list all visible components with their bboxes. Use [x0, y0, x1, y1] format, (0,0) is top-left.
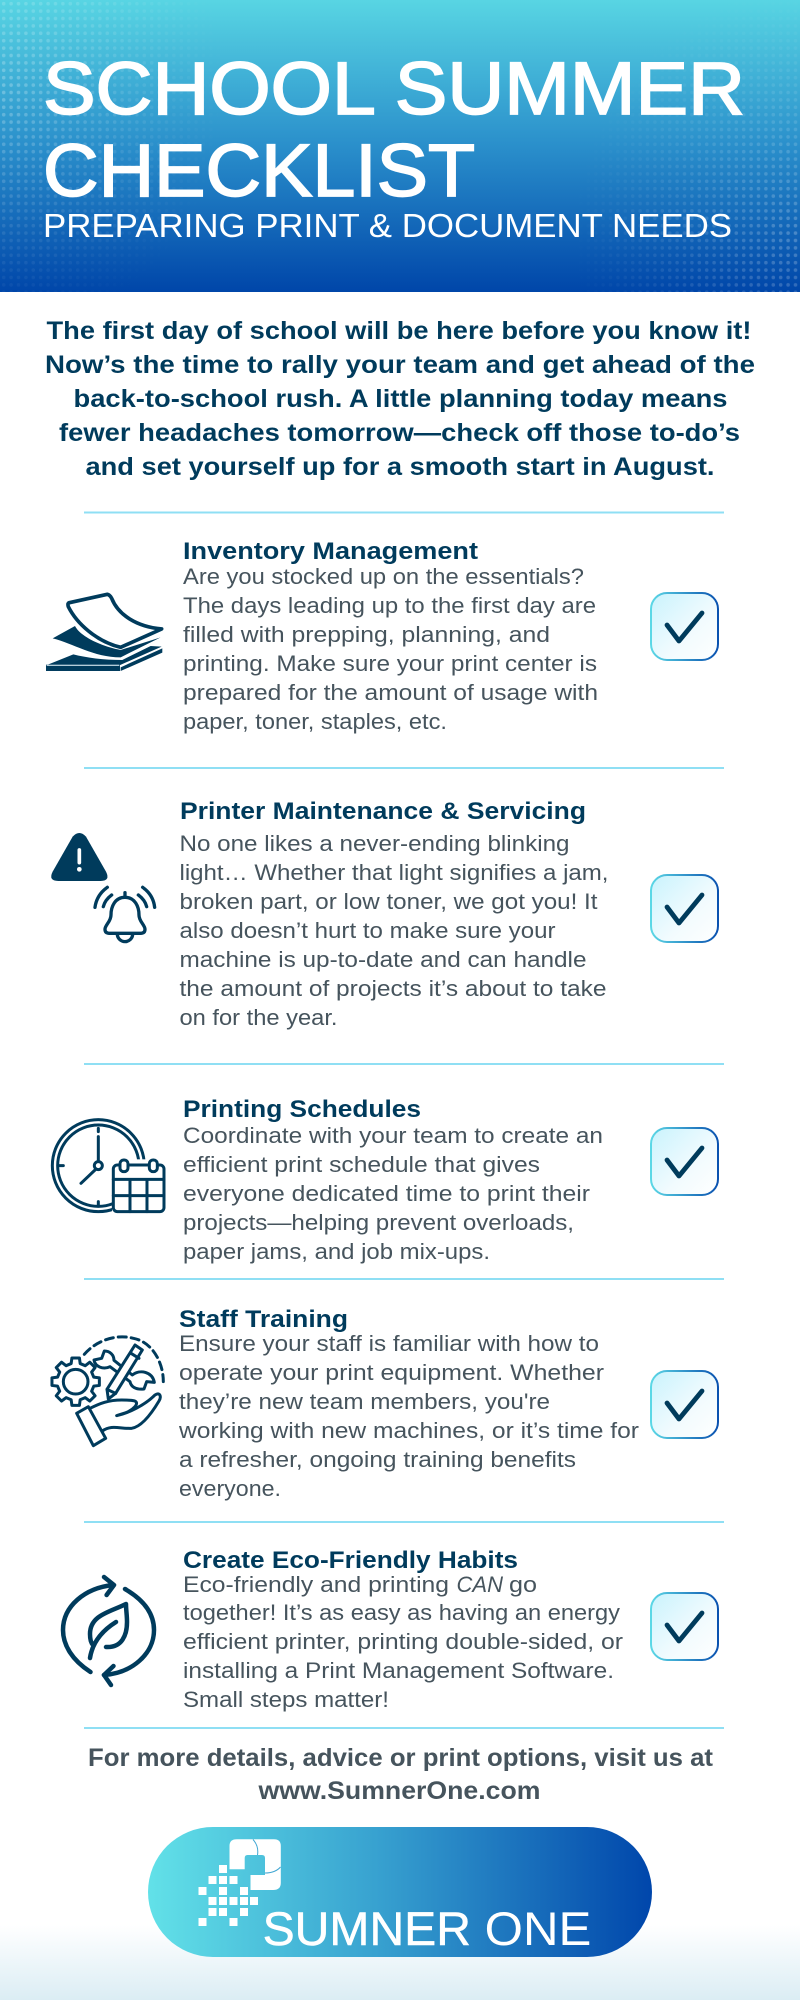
heading: Inventory Management: [183, 538, 478, 565]
body text: [183, 1123, 603, 1264]
body text: prepared for the amount of usage with: [183, 680, 598, 705]
panel: printing schedules: [52, 1096, 718, 1264]
body text: projects—helping prevent overloads,: [183, 1210, 574, 1235]
intro paragraph: back-to-school rush. A little planning today means: [74, 385, 728, 413]
body text: efficient print schedule that gives: [183, 1152, 540, 1177]
intro paragraph: The first day of school will be here before you know it!: [46, 317, 752, 345]
body text: printing. Make sure your print center is: [183, 651, 597, 676]
body text: CAN: [456, 1572, 504, 1597]
body text: operate your print equipment. Whether: [179, 1360, 605, 1385]
intro paragraph: and set yourself up for a smooth start in August.: [86, 453, 714, 481]
logo pill: [148, 1827, 652, 1957]
icon: checked box: [651, 1593, 718, 1660]
body text: [183, 1572, 624, 1712]
icon: checked box: [651, 1128, 718, 1195]
body text: everyone dedicated time to print their: [183, 1181, 591, 1206]
body text: installing a Print Management Software.: [183, 1658, 614, 1683]
body text: [180, 831, 608, 1030]
heading: Create Eco-Friendly Habits: [183, 1547, 518, 1574]
body text: a refresher, ongoing training benefits: [179, 1447, 576, 1472]
body text: also doesn’t hurt to make sure your: [180, 918, 556, 943]
body text: No one likes a never-ending blinking: [180, 831, 570, 856]
call to action text: For more details, advice or print options, visit us at: [88, 1744, 714, 1772]
body text: Eco-friendly and printing: [183, 1572, 449, 1597]
intro paragraph: Now’s the time to rally your team and get ahead of the: [45, 351, 755, 379]
icon: checked box: [651, 1371, 718, 1438]
subtitle: PREPARING PRINT & DOCUMENT NEEDS: [43, 207, 732, 244]
heading: Printer Maintenance & Servicing: [180, 798, 586, 825]
footer background fade: [0, 1925, 800, 2000]
heading: Printing Schedules: [183, 1096, 421, 1123]
icon: recycle leaf: [63, 1577, 154, 1685]
body text: working with new machines, or it’s time for: [178, 1418, 640, 1443]
body text: [183, 564, 598, 734]
body text: paper, toner, staples, etc.: [183, 709, 447, 734]
body text: [178, 1331, 640, 1501]
body text: Coordinate with your team to create an: [183, 1123, 603, 1148]
icon: logo mark: [198, 1839, 281, 1926]
body text: Small steps matter!: [183, 1687, 389, 1712]
body text: filled with prepping, planning, and: [183, 622, 550, 647]
body text: go: [509, 1572, 537, 1597]
body text: efficient printer, printing double-sided, or: [183, 1629, 624, 1654]
title: [43, 47, 745, 212]
intro paragraph: fewer headaches tomorrow—check off those to-do’s: [59, 419, 740, 447]
icon: checked box: [651, 593, 718, 660]
body text: on for the year.: [180, 1005, 338, 1030]
header banner: [0, 0, 800, 292]
body text: light… Whether that light signifies a jam,: [180, 860, 608, 885]
call to action text: [88, 1744, 714, 1805]
body text: the amount of projects it’s about to take: [180, 976, 606, 1001]
logo wordmark: ONE: [485, 1902, 591, 1955]
body text: they’re new team members, you're: [179, 1389, 550, 1414]
icon: gear, tools and hand: [52, 1337, 163, 1446]
body text: The days leading up to the first day are: [183, 593, 596, 618]
panel: eco-friendly habits: [63, 1547, 718, 1712]
title: SCHOOL SUMMER: [43, 47, 745, 130]
body text: everyone.: [179, 1476, 281, 1501]
intro paragraph: [45, 317, 755, 481]
panel: inventory management: [46, 538, 718, 734]
panel: printer maintenance: [51, 798, 718, 1030]
panel: staff training: [52, 1306, 718, 1501]
logo wordmark: SUMNER: [263, 1902, 471, 1955]
heading: Staff Training: [179, 1306, 348, 1333]
body text: broken part, or low toner, we got you! It: [180, 889, 598, 914]
body text: paper jams, and job mix-ups.: [183, 1239, 490, 1264]
icon: warning triangle and bell: [51, 833, 155, 942]
body text: together! It’s as easy as having an energy: [183, 1600, 621, 1625]
body text: machine is up-to-date and can handle: [180, 947, 586, 972]
icon: checked box: [651, 875, 718, 942]
body text: Are you stocked up on the essentials?: [183, 564, 584, 589]
title: CHECKLIST: [43, 129, 475, 212]
icon: paper stack: [46, 594, 162, 671]
body text: Ensure your staff is familiar with how to: [179, 1331, 599, 1356]
call to action text: www.SumnerOne.com: [257, 1777, 540, 1805]
icon: clock and calendar: [52, 1120, 169, 1218]
logo wordmark: [263, 1902, 591, 1955]
